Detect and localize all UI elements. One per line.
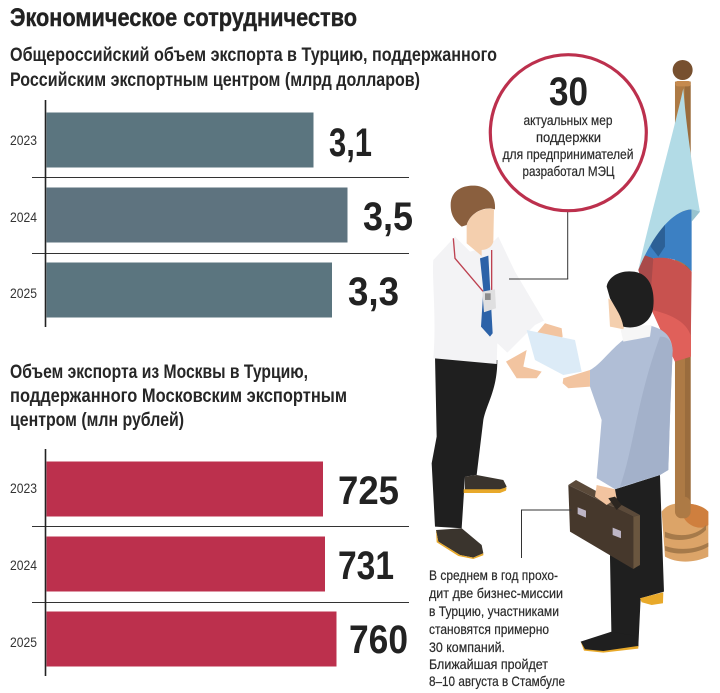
bar chart: Moscow export: 2025 [10,635,37,650]
callout: business missions note: 30 компаний. [429,639,505,655]
callout: business missions note: становятся примерно [429,621,549,637]
bar chart: Moscow export [10,449,409,676]
heading: Moscow export chart: Объем экспорта из Москвы в Турцию, [10,362,308,383]
illustration: flag on pole [638,60,708,562]
illustration: man with briefcase [563,271,673,653]
bar chart: Moscow export: 2023 [10,481,37,496]
bar chart: Russia export [10,100,413,327]
bar chart: Russia export: 2025 [10,286,37,301]
bar chart: Russia export: 3,3 [348,270,399,314]
heading: Moscow export chart: поддержанного Московским экспортным [10,386,347,407]
bar chart: Moscow export: 2024 [10,558,37,573]
callout: 30 support measures: поддержки [536,129,601,145]
heading: Russia export chart: Российским экспортным центром (млрд долларов) [10,70,420,91]
heading: Moscow export chart [10,362,347,431]
callout: business missions note: Ближайшая пройдет [429,656,549,672]
callout: 30 support measures: для предпринимателей [502,146,634,162]
heading: Moscow export chart: центром (млн рублей) [10,410,184,431]
bar chart: Russia export: 2023 [10,133,37,148]
callout: business missions note: в Турцию, участниками [429,603,559,619]
callout: 30 support measures: разработал МЭЦ [522,163,615,179]
callout: business missions note: 8–10 августа в Стамбуле [429,673,565,689]
callout: 30 support measures: актуальных мер [524,112,613,128]
illustration: man in white shirt [432,186,582,559]
callout: 30 support measures [490,55,646,279]
callout: business missions note [429,510,572,689]
bar chart: Moscow export: 760 [349,618,408,662]
title: Экономическое сотрудничество [10,4,357,32]
bar chart: Russia export: 3,1 [329,121,372,165]
callout: 30 support measures: 30 [549,70,588,114]
bar chart: Russia export: 2024 [10,210,37,225]
callout: business missions note: В среднем в год прохо- [429,567,558,583]
bar chart: Moscow export: 725 [338,469,399,513]
callout: business missions note: дит две бизнес-миссии [429,585,563,601]
heading: Russia export chart: Общероссийский объем экспорта в Турцию, поддержанного [10,45,497,66]
bar chart: Russia export: 3,5 [363,195,413,239]
heading: Russia export chart [10,45,497,91]
bar chart: Moscow export: 731 [338,544,394,588]
